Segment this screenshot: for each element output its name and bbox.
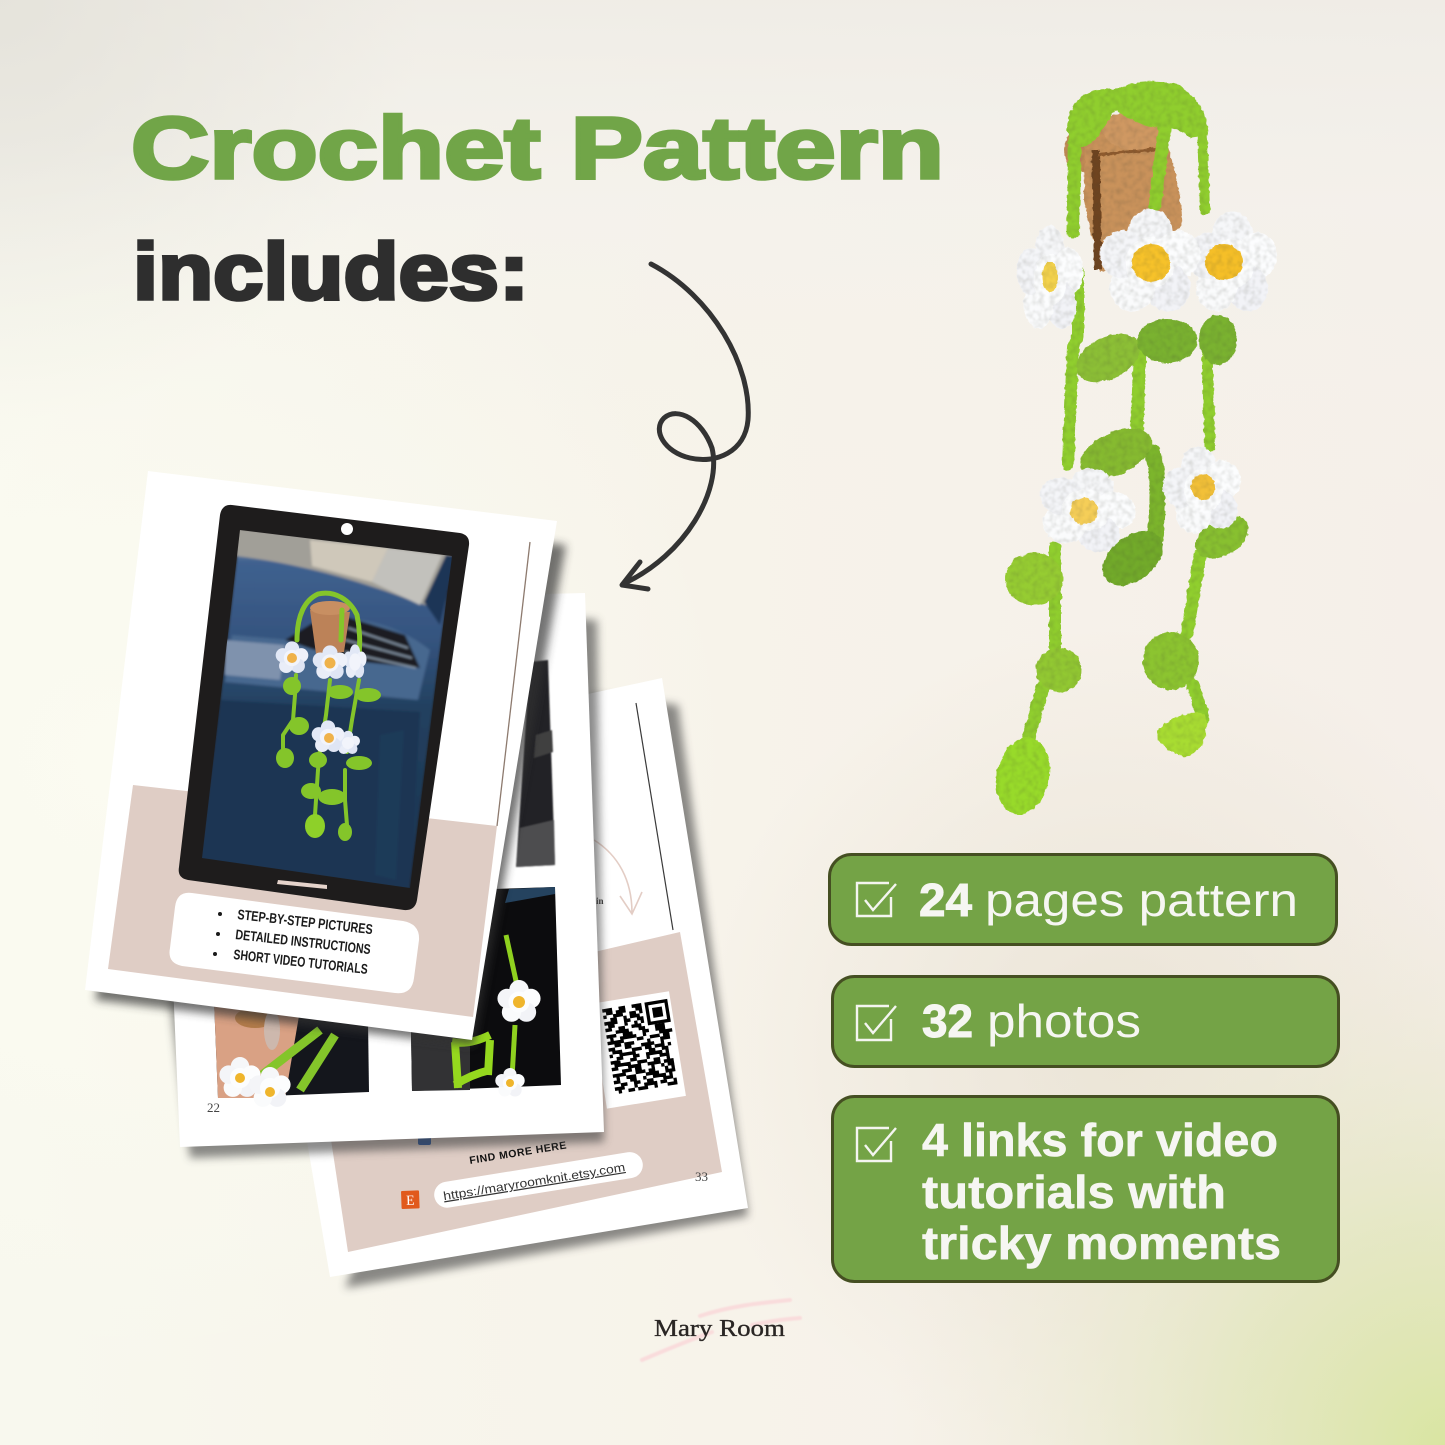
label: 4 links for video tutorials with tricky moments: tricky moments xyxy=(922,1217,1281,1269)
crochet plant photo xyxy=(989,82,1277,820)
white callout with bullet list xyxy=(170,893,419,993)
pot xyxy=(1064,110,1182,272)
small text fragment: in xyxy=(596,896,604,906)
white callout with bullet list: SHORT VIDEO TUTORIALS xyxy=(233,946,369,977)
find more here: FIND MORE HERE xyxy=(469,1139,568,1167)
panel: feature box 24 pages xyxy=(830,854,1336,944)
label: 4 links for video tutorials with tricky moments: tutorials with xyxy=(922,1166,1226,1218)
tablet frame xyxy=(179,505,469,910)
panel: feature box video links xyxy=(832,1096,1338,1282)
etsy icon xyxy=(401,1190,420,1209)
label: 32 photos xyxy=(922,995,1141,1047)
icon: checkbox xyxy=(857,1128,896,1161)
tablet home bar xyxy=(277,880,327,889)
link pill: https://maryroomknit.etsy.com xyxy=(442,1160,626,1203)
vertical rule on page 33 xyxy=(636,703,673,930)
vertical rule xyxy=(497,542,530,826)
etsy icon: E xyxy=(406,1194,415,1209)
mini plant in photo xyxy=(276,593,381,841)
label: 24 pages pattern: 24 xyxy=(919,874,972,926)
white callout with bullet list: DETAILED INSTRUCTIONS xyxy=(235,926,372,957)
photo: top right dark interior xyxy=(516,660,555,867)
logo: Mary Room: Mary Room xyxy=(654,1316,785,1342)
title: Crochet Pattern xyxy=(131,100,944,197)
panel: front page with tablet xyxy=(85,471,566,1046)
label: 32 photos: photos xyxy=(987,995,1141,1047)
flowers xyxy=(1017,209,1277,560)
photo: hand holding plant xyxy=(214,1000,369,1107)
panel: middle page 22 xyxy=(170,593,604,1158)
label: 32 photos: 32 xyxy=(922,995,973,1047)
pink band on page 33 xyxy=(328,932,722,1252)
white callout with bullet list: STEP-BY-STEP PICTURES xyxy=(237,906,374,937)
pink band xyxy=(108,785,497,1017)
hanger top xyxy=(1067,82,1208,146)
icon: checkbox xyxy=(857,1006,896,1040)
tablet screen photo xyxy=(200,528,456,890)
arrow: curly arrow pointing at the pages xyxy=(622,264,748,589)
logo: Mary Room xyxy=(642,1300,800,1360)
panel: back page 33 xyxy=(300,678,748,1288)
title xyxy=(131,100,944,316)
page number 33: 33 xyxy=(695,1169,708,1184)
label: 4 links for video tutorials with tricky moments: 4 links for video xyxy=(922,1114,1278,1166)
icon: checkbox xyxy=(857,883,896,916)
label: 4 links for video tutorials with tricky moments xyxy=(922,1114,1281,1269)
QR code xyxy=(590,991,686,1109)
small pink arrow xyxy=(594,840,642,914)
tablet camera dot xyxy=(341,523,353,535)
title: includes: xyxy=(133,227,529,316)
photo: flower on dark interior xyxy=(411,887,561,1096)
facebook icon fragment xyxy=(418,1132,431,1145)
link pill xyxy=(432,1150,645,1210)
stems xyxy=(1028,125,1210,740)
leaves xyxy=(989,315,1256,820)
label: 24 pages pattern: pages pattern xyxy=(985,874,1298,926)
page number 22: 22 xyxy=(207,1100,220,1115)
panel: feature box 32 photos xyxy=(832,976,1338,1066)
